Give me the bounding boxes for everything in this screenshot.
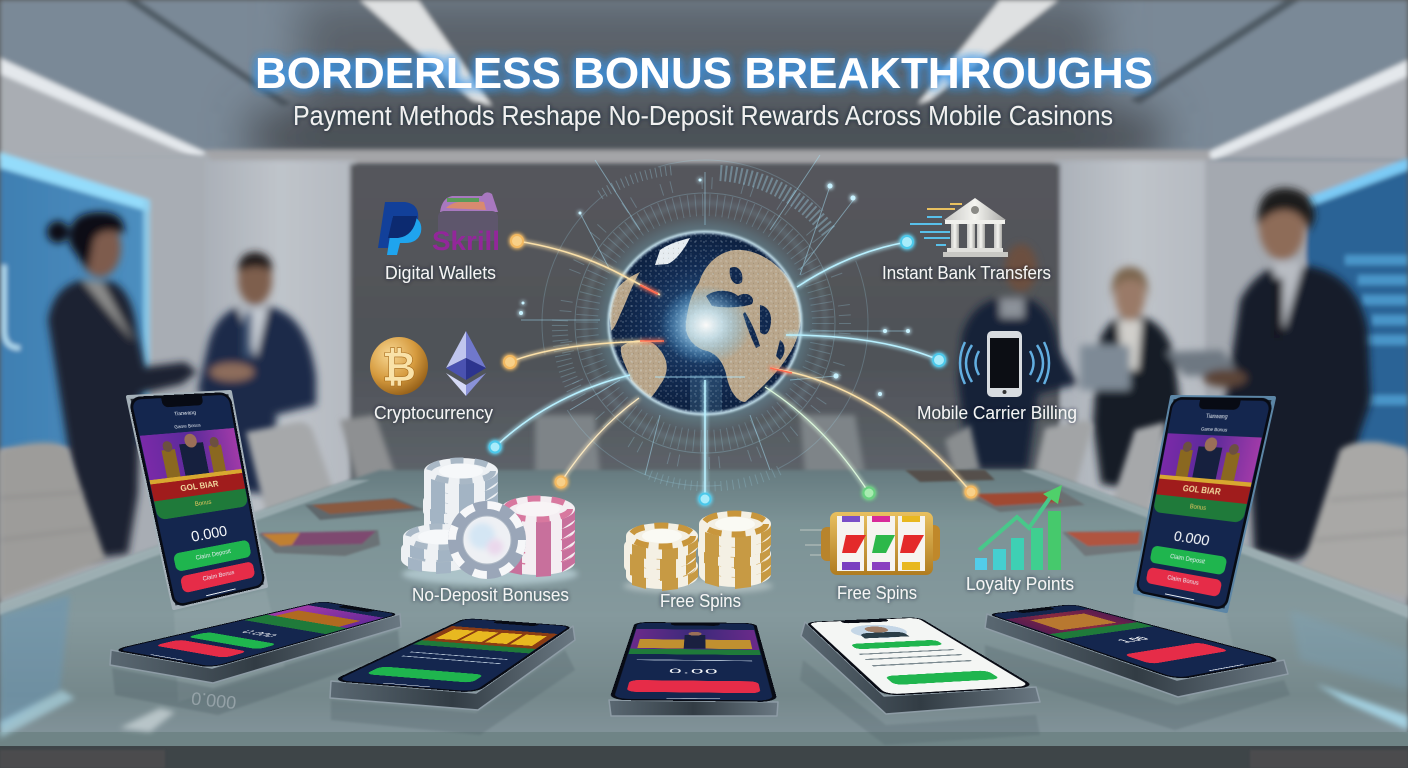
- continents: [608, 238, 801, 404]
- icon: Bitcoin coin: [370, 337, 428, 395]
- label: cryptocurrency: Cryptocurrency: [374, 403, 493, 423]
- connector: no-deposit bonuses: [490, 375, 630, 452]
- phone: flat center screen: 0.00: [668, 667, 719, 675]
- label: mobile carrier billing: Mobile Carrier Billing: [917, 403, 1077, 423]
- body: flat second phone: [330, 626, 575, 735]
- connector: free spins chips: [556, 398, 639, 488]
- connector: bank transfers: [797, 236, 913, 287]
- background people: [47, 188, 1371, 561]
- icon: mobile phone with signal waves: [960, 331, 1049, 397]
- phone: flat second screen: [331, 618, 573, 693]
- connector: slot machine: [765, 387, 874, 498]
- phone: upright right screen: GOL BIAR: [1182, 484, 1222, 497]
- connector: loyalty points: [770, 368, 976, 498]
- connector: carrier billing: [786, 335, 945, 366]
- phone: upright left screen: Game Bonus: [174, 422, 201, 430]
- phone: upright left screen: Claim Bonus: [202, 570, 235, 583]
- background chairs: [0, 415, 1408, 600]
- wall panels: [0, 152, 1408, 620]
- phone: upright left screen: Tianwang: [174, 410, 197, 418]
- icon: Skrill wallet: [432, 192, 500, 256]
- holographic HUD rings: [519, 155, 910, 486]
- phone: upright right screen: Tianwang: [1205, 414, 1228, 421]
- icon: slot machine: [800, 512, 940, 575]
- label: no-deposit bonuses: No-Deposit Bonuses: [412, 585, 569, 605]
- globe: [589, 213, 821, 433]
- body: upright right phone: [1130, 397, 1274, 700]
- icon: bank building: [910, 198, 1008, 257]
- glass table: [0, 470, 1408, 768]
- phone: upright right screen: Claim Deposit: [1169, 554, 1205, 566]
- subtitle: Payment Methods Reshape No-Deposit Rewards Across Mobile Casinons: [293, 100, 1113, 131]
- connector: free spins center: [700, 380, 710, 504]
- connector: cryptocurrency: [504, 341, 664, 368]
- person: man right front: [1165, 188, 1371, 561]
- reflection: upright left phone: [174, 590, 285, 713]
- phone: flat right screen: 1.00: [1113, 635, 1154, 644]
- icon: loyalty growth chart: [975, 485, 1062, 570]
- person: woman left: [47, 212, 197, 559]
- phone: flat left screen: 0.000: [237, 629, 282, 638]
- phone: flat white screen: [805, 617, 1036, 696]
- label: loyalty points: Loyalty Points: [966, 574, 1074, 594]
- phone: flat right screen: [987, 604, 1284, 680]
- phone: upright left screen: Claim Deposit: [195, 549, 231, 562]
- body: flat right phone: [985, 614, 1290, 730]
- reflection: upright left phone: 0.000: [190, 688, 237, 713]
- icon: Skrill wallet: Skrill: [432, 226, 500, 256]
- phone: flat center screen: [609, 622, 778, 702]
- background tablets on the table: [258, 470, 1146, 556]
- label: instant bank transfers: Instant Bank Transfers: [882, 263, 1051, 283]
- icon: PayPal logo: [378, 202, 421, 255]
- phone bodies and reflections: [110, 392, 1290, 745]
- body: flat center phone: [609, 700, 778, 716]
- phone: upright right screen: Game Bonus: [1200, 426, 1228, 433]
- phone: upright right screen: 0.000: [1172, 528, 1211, 550]
- phone: upright left screen: 0.000: [190, 523, 229, 546]
- label: digital wallets: Digital Wallets: [385, 263, 496, 283]
- person: man right rear: [958, 244, 1078, 469]
- person: woman right: [1080, 267, 1181, 492]
- icon: gold chip stacks: [623, 511, 773, 594]
- body: flat white phone: [800, 622, 1040, 745]
- label: free spins (slot): Free Spins: [837, 583, 917, 603]
- phone: upright right screen: [1135, 397, 1274, 611]
- icon: Bitcoin coin: ₿: [382, 343, 416, 390]
- phone: upright right screen: Bonus: [1189, 504, 1207, 512]
- phone: upright right screen: Claim Bonus: [1167, 575, 1199, 587]
- body: flat left phone: [110, 614, 401, 715]
- phone: flat left screen: [111, 601, 400, 668]
- phone: upright left screen: Bonus: [194, 500, 212, 508]
- person: man left: [198, 252, 316, 495]
- phone: upright left screen: [128, 392, 266, 608]
- phone: upright left screen: GOL BIAR: [180, 479, 219, 493]
- connector lines and nodes: [490, 235, 976, 504]
- connector: digital wallets: [511, 235, 659, 295]
- body: upright left phone: [128, 392, 266, 608]
- title: BORDERLESS BONUS BREAKTHROUGHS: [255, 49, 1153, 98]
- label: free spins (chips): Free Spins: [660, 591, 741, 611]
- ceiling: [0, 0, 1408, 170]
- icon: no-deposit chip stacks: [401, 458, 578, 585]
- icon: Ethereum diamond: [446, 331, 486, 396]
